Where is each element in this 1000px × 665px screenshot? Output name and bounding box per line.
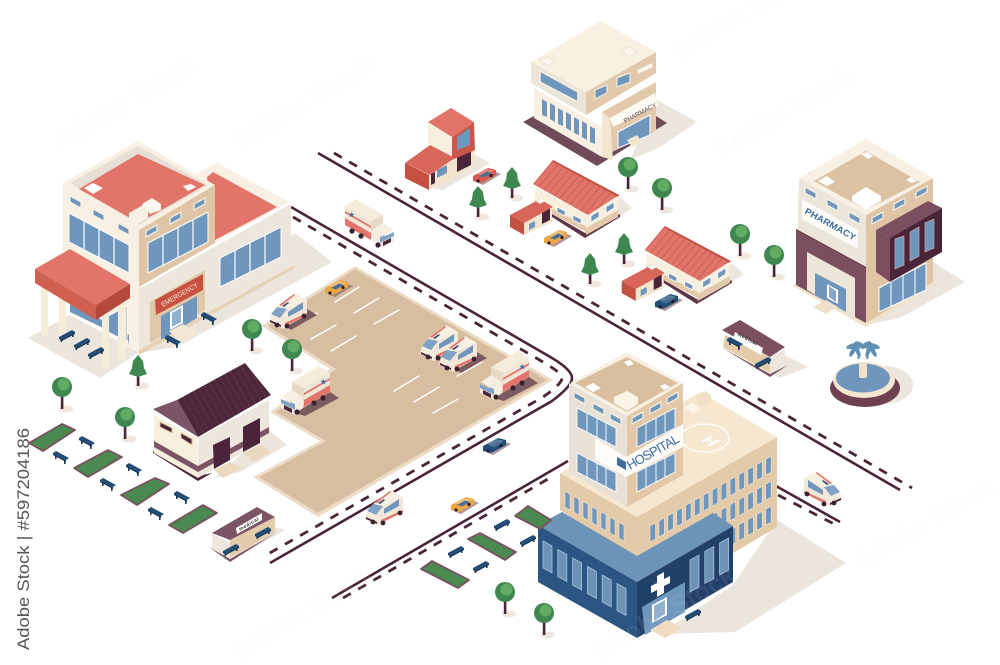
trees lower [495, 582, 555, 638]
icon: medical cross [651, 572, 670, 597]
tower windows [577, 408, 675, 492]
upper tower [63, 141, 215, 353]
wing wall [139, 201, 295, 355]
warehouse roof [153, 363, 271, 437]
red cube house [405, 108, 490, 190]
bus shelter top right [721, 320, 808, 378]
blue block windows [543, 538, 729, 616]
low block walls [560, 437, 777, 610]
blue block [538, 512, 733, 638]
watermark: Adobe Stock [228, 559, 381, 665]
small roof units [540, 47, 653, 74]
roads network [268, 153, 912, 598]
low block windows [565, 456, 771, 551]
entrance with pharmacy sign: PHARMACY [623, 103, 658, 125]
house one [510, 160, 632, 238]
stock id label: Adobe Stock | #597204186 [14, 428, 33, 650]
pharmacy right building [793, 139, 965, 327]
trees top [469, 157, 785, 288]
bus shelter: medical [209, 507, 285, 562]
benches between planters [53, 436, 190, 520]
roof equipment [684, 391, 711, 414]
road: lower street left [332, 461, 568, 598]
warehouse building [153, 363, 287, 481]
hospital banner [595, 424, 683, 477]
wing roof [198, 163, 291, 245]
lower window band [879, 263, 926, 312]
bench at hospital [685, 609, 701, 621]
main hospital [538, 352, 846, 638]
road: lower street right [776, 486, 840, 526]
pharmacy top building [523, 21, 697, 166]
watermark: Adobe Stock [48, 49, 201, 155]
lower glass and pillars [41, 285, 129, 369]
tower roof [570, 352, 683, 416]
benches lower [448, 519, 536, 573]
protruding maroon box [876, 201, 942, 282]
roof units [818, 152, 917, 210]
parking lot [253, 266, 553, 517]
watermark: Adobe Stock [588, 559, 741, 665]
fountain [830, 340, 913, 407]
helipad [681, 424, 729, 452]
planters lower [421, 506, 551, 588]
watermark: Adobe Stock [848, 469, 1000, 575]
emergency hospital [28, 141, 332, 378]
tower walls [569, 383, 683, 507]
palm fronds [846, 340, 880, 359]
road: curve around parking [268, 207, 572, 563]
small windows [805, 186, 927, 224]
windows [540, 71, 630, 144]
hospital entrance [642, 582, 685, 638]
watermark: Adobe Stock [708, 59, 861, 165]
pharmacy sign: PHARMACY [803, 206, 858, 242]
hospital banner: HOSPITAL [624, 431, 682, 473]
red awning [35, 249, 130, 320]
cars [325, 168, 683, 514]
entrance with emergency sign [150, 270, 205, 343]
trees left [52, 319, 303, 442]
bus shelter top right: medical [736, 332, 759, 348]
benches near emergency [59, 312, 217, 359]
pharmacy sign [802, 199, 858, 249]
tower windows [69, 196, 208, 273]
watermark: Adobe Stock [228, 49, 381, 155]
maroon entrance frame [796, 229, 866, 323]
ground shadow [28, 233, 332, 378]
road: upper avenue [318, 153, 912, 490]
entrance with pharmacy sign [602, 93, 658, 160]
low block roof [560, 392, 777, 517]
bus shelter: medical: medical [238, 516, 261, 533]
planters left [29, 424, 217, 533]
entrance with emergency sign: EMERGENCY [160, 282, 200, 309]
helipad: H [696, 434, 724, 449]
parked ambulances and trucks [269, 199, 842, 526]
ground shadow [660, 520, 846, 634]
house two [622, 226, 744, 304]
